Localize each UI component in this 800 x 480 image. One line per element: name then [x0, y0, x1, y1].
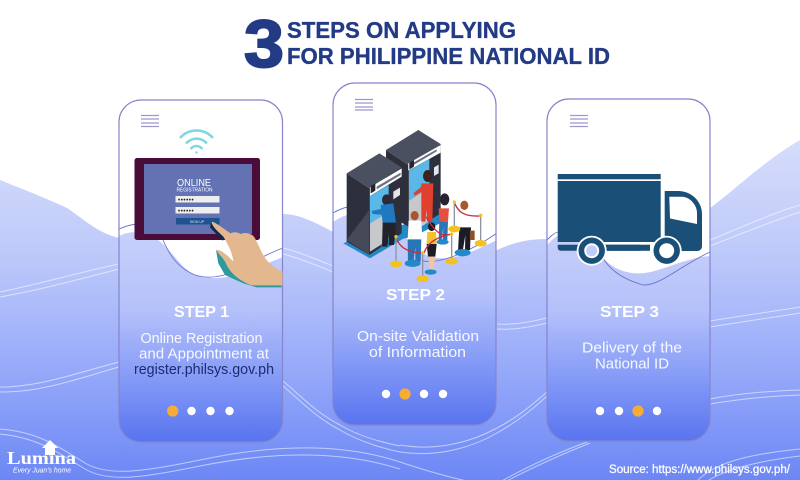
background flowing lines	[0, 205, 800, 480]
icon: wifi	[180, 130, 213, 154]
icon: tablet: ••••••	[178, 208, 194, 214]
icon: tablet	[134, 158, 260, 240]
icon: delivery truck	[558, 174, 702, 266]
panel: step 1	[119, 100, 283, 442]
icon: tablet: ONLINE	[177, 177, 211, 189]
title: STEPS ON APPLYING	[287, 17, 516, 43]
step heading: STEP 2	[386, 287, 445, 304]
step description: National ID	[595, 356, 669, 372]
queue: man white shirt	[450, 201, 475, 256]
queue: woman yellow	[425, 222, 437, 275]
pagination dots	[596, 405, 661, 417]
pagination dots	[167, 405, 234, 417]
step description: and Appointment at	[139, 346, 269, 362]
step description: register.philsys.gov.ph	[134, 362, 274, 378]
source note: Source: https://www.philsys.gov.ph/	[609, 464, 791, 476]
title	[244, 7, 610, 82]
queue: man front	[405, 211, 422, 267]
step description: of Information	[369, 345, 466, 361]
icon: tablet: SIGN UP	[190, 220, 205, 224]
icon: tablet: REGISTRATION	[176, 188, 213, 194]
icon: menu	[570, 116, 588, 126]
step description	[582, 340, 682, 372]
logo: Lumina: Every Juan's home	[13, 468, 71, 474]
title: 3	[244, 7, 284, 82]
queue stanchions	[396, 203, 480, 253]
step description: Online Registration	[140, 331, 262, 347]
icon: menu	[355, 100, 373, 110]
step heading: STEP 3	[600, 304, 659, 321]
background wave	[0, 140, 800, 480]
logo: Lumina: Lumina	[7, 448, 76, 468]
person at kiosk 2	[413, 170, 433, 222]
step description	[134, 331, 274, 378]
step heading: STEP 1	[174, 304, 229, 321]
step description	[357, 329, 479, 361]
back kiosk	[386, 130, 441, 234]
illustration: kiosks and queue	[343, 130, 487, 282]
icon: hand	[210, 222, 283, 287]
icon: menu	[141, 116, 159, 126]
panel: step 3	[547, 99, 710, 441]
logo: Lumina	[7, 440, 76, 474]
panel: step 2	[333, 83, 497, 425]
icon: tablet: ••••••	[178, 198, 194, 204]
step description: Delivery of the	[582, 340, 682, 356]
pagination dots	[382, 388, 447, 400]
step description: On-site Validation	[357, 329, 479, 345]
queue: woman with handbag	[437, 193, 449, 245]
front kiosk	[347, 153, 402, 255]
title: FOR PHILIPPINE NATIONAL ID	[287, 43, 610, 69]
person at kiosk 1	[372, 194, 398, 248]
